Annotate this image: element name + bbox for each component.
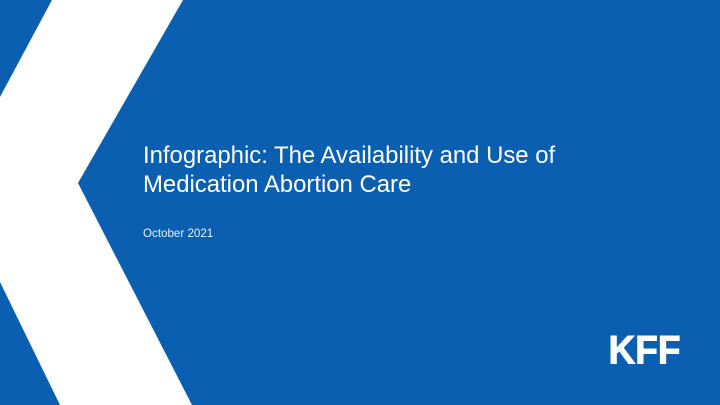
title: Infographic: The Availability and Use of xyxy=(143,142,555,169)
date: October 2021 xyxy=(143,226,213,240)
title xyxy=(143,142,556,198)
title: Medication Abortion Care xyxy=(143,171,411,198)
